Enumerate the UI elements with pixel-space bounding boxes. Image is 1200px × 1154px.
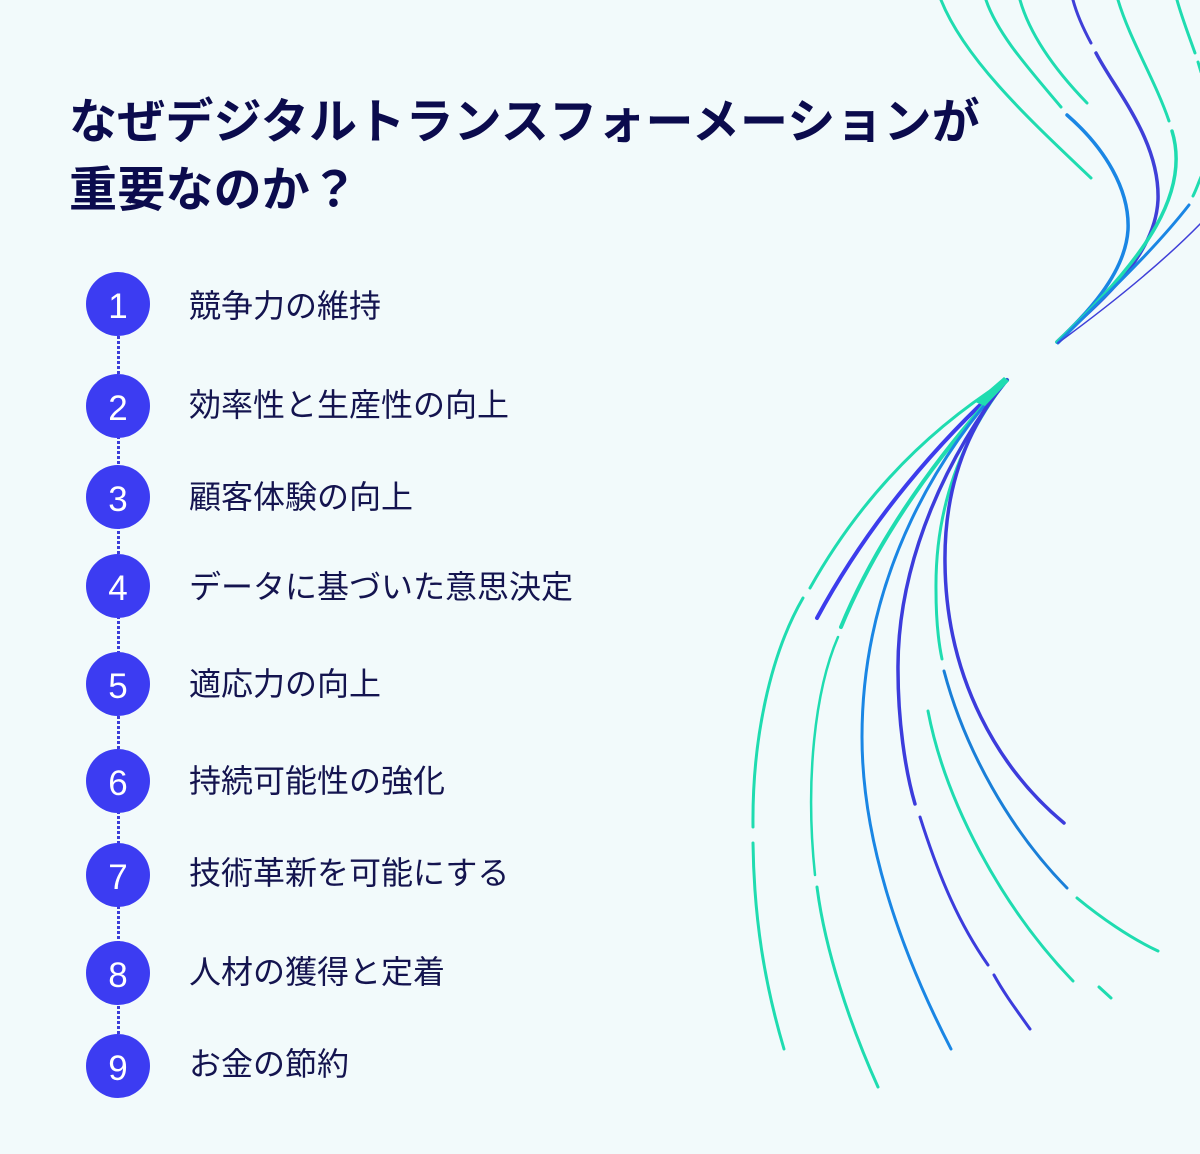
item text 3: 顧客体験の向上 bbox=[189, 479, 413, 515]
item text 8: 人材の獲得と定着 bbox=[189, 954, 445, 990]
title: なぜデジタルトランスフォーメーションが bbox=[69, 96, 980, 149]
number badge 7 bbox=[86, 843, 150, 907]
number badge 5 bbox=[86, 652, 150, 716]
item text 2: 効率性と生産性の向上 bbox=[189, 387, 509, 423]
number badge 9: 9 bbox=[108, 1049, 128, 1088]
title: 重要なのか？ bbox=[69, 164, 358, 217]
number badge 1: 1 bbox=[108, 287, 128, 326]
number badge 9 bbox=[86, 1034, 150, 1098]
number badge 1 bbox=[86, 272, 150, 336]
item text 6: 持続可能性の強化 bbox=[189, 763, 445, 799]
number badge 7: 7 bbox=[108, 858, 128, 897]
number badge 5: 5 bbox=[108, 667, 128, 706]
dotted connector line bbox=[116, 336, 120, 1036]
number badge 2 bbox=[86, 374, 150, 438]
item text 1: 競争力の維持 bbox=[189, 288, 381, 324]
item text 5: 適応力の向上 bbox=[189, 666, 381, 702]
number badge 6: 6 bbox=[108, 764, 128, 803]
number badge 8 bbox=[86, 941, 150, 1005]
number badge 8: 8 bbox=[108, 956, 128, 995]
item text 7: 技術革新を可能にする bbox=[189, 855, 509, 891]
number badge 6 bbox=[86, 749, 150, 813]
number badge 3: 3 bbox=[108, 480, 128, 519]
bottom right curves bbox=[753, 377, 1158, 1087]
number badge 2: 2 bbox=[108, 389, 128, 428]
number badge 3 bbox=[86, 465, 150, 529]
number badge 4: 4 bbox=[108, 569, 128, 608]
item text 4: データに基づいた意思決定 bbox=[189, 569, 573, 605]
number badge 4 bbox=[86, 554, 150, 618]
title bbox=[69, 96, 980, 217]
top right curves bbox=[941, 0, 1200, 343]
item text 9: お金の節約 bbox=[189, 1046, 349, 1082]
